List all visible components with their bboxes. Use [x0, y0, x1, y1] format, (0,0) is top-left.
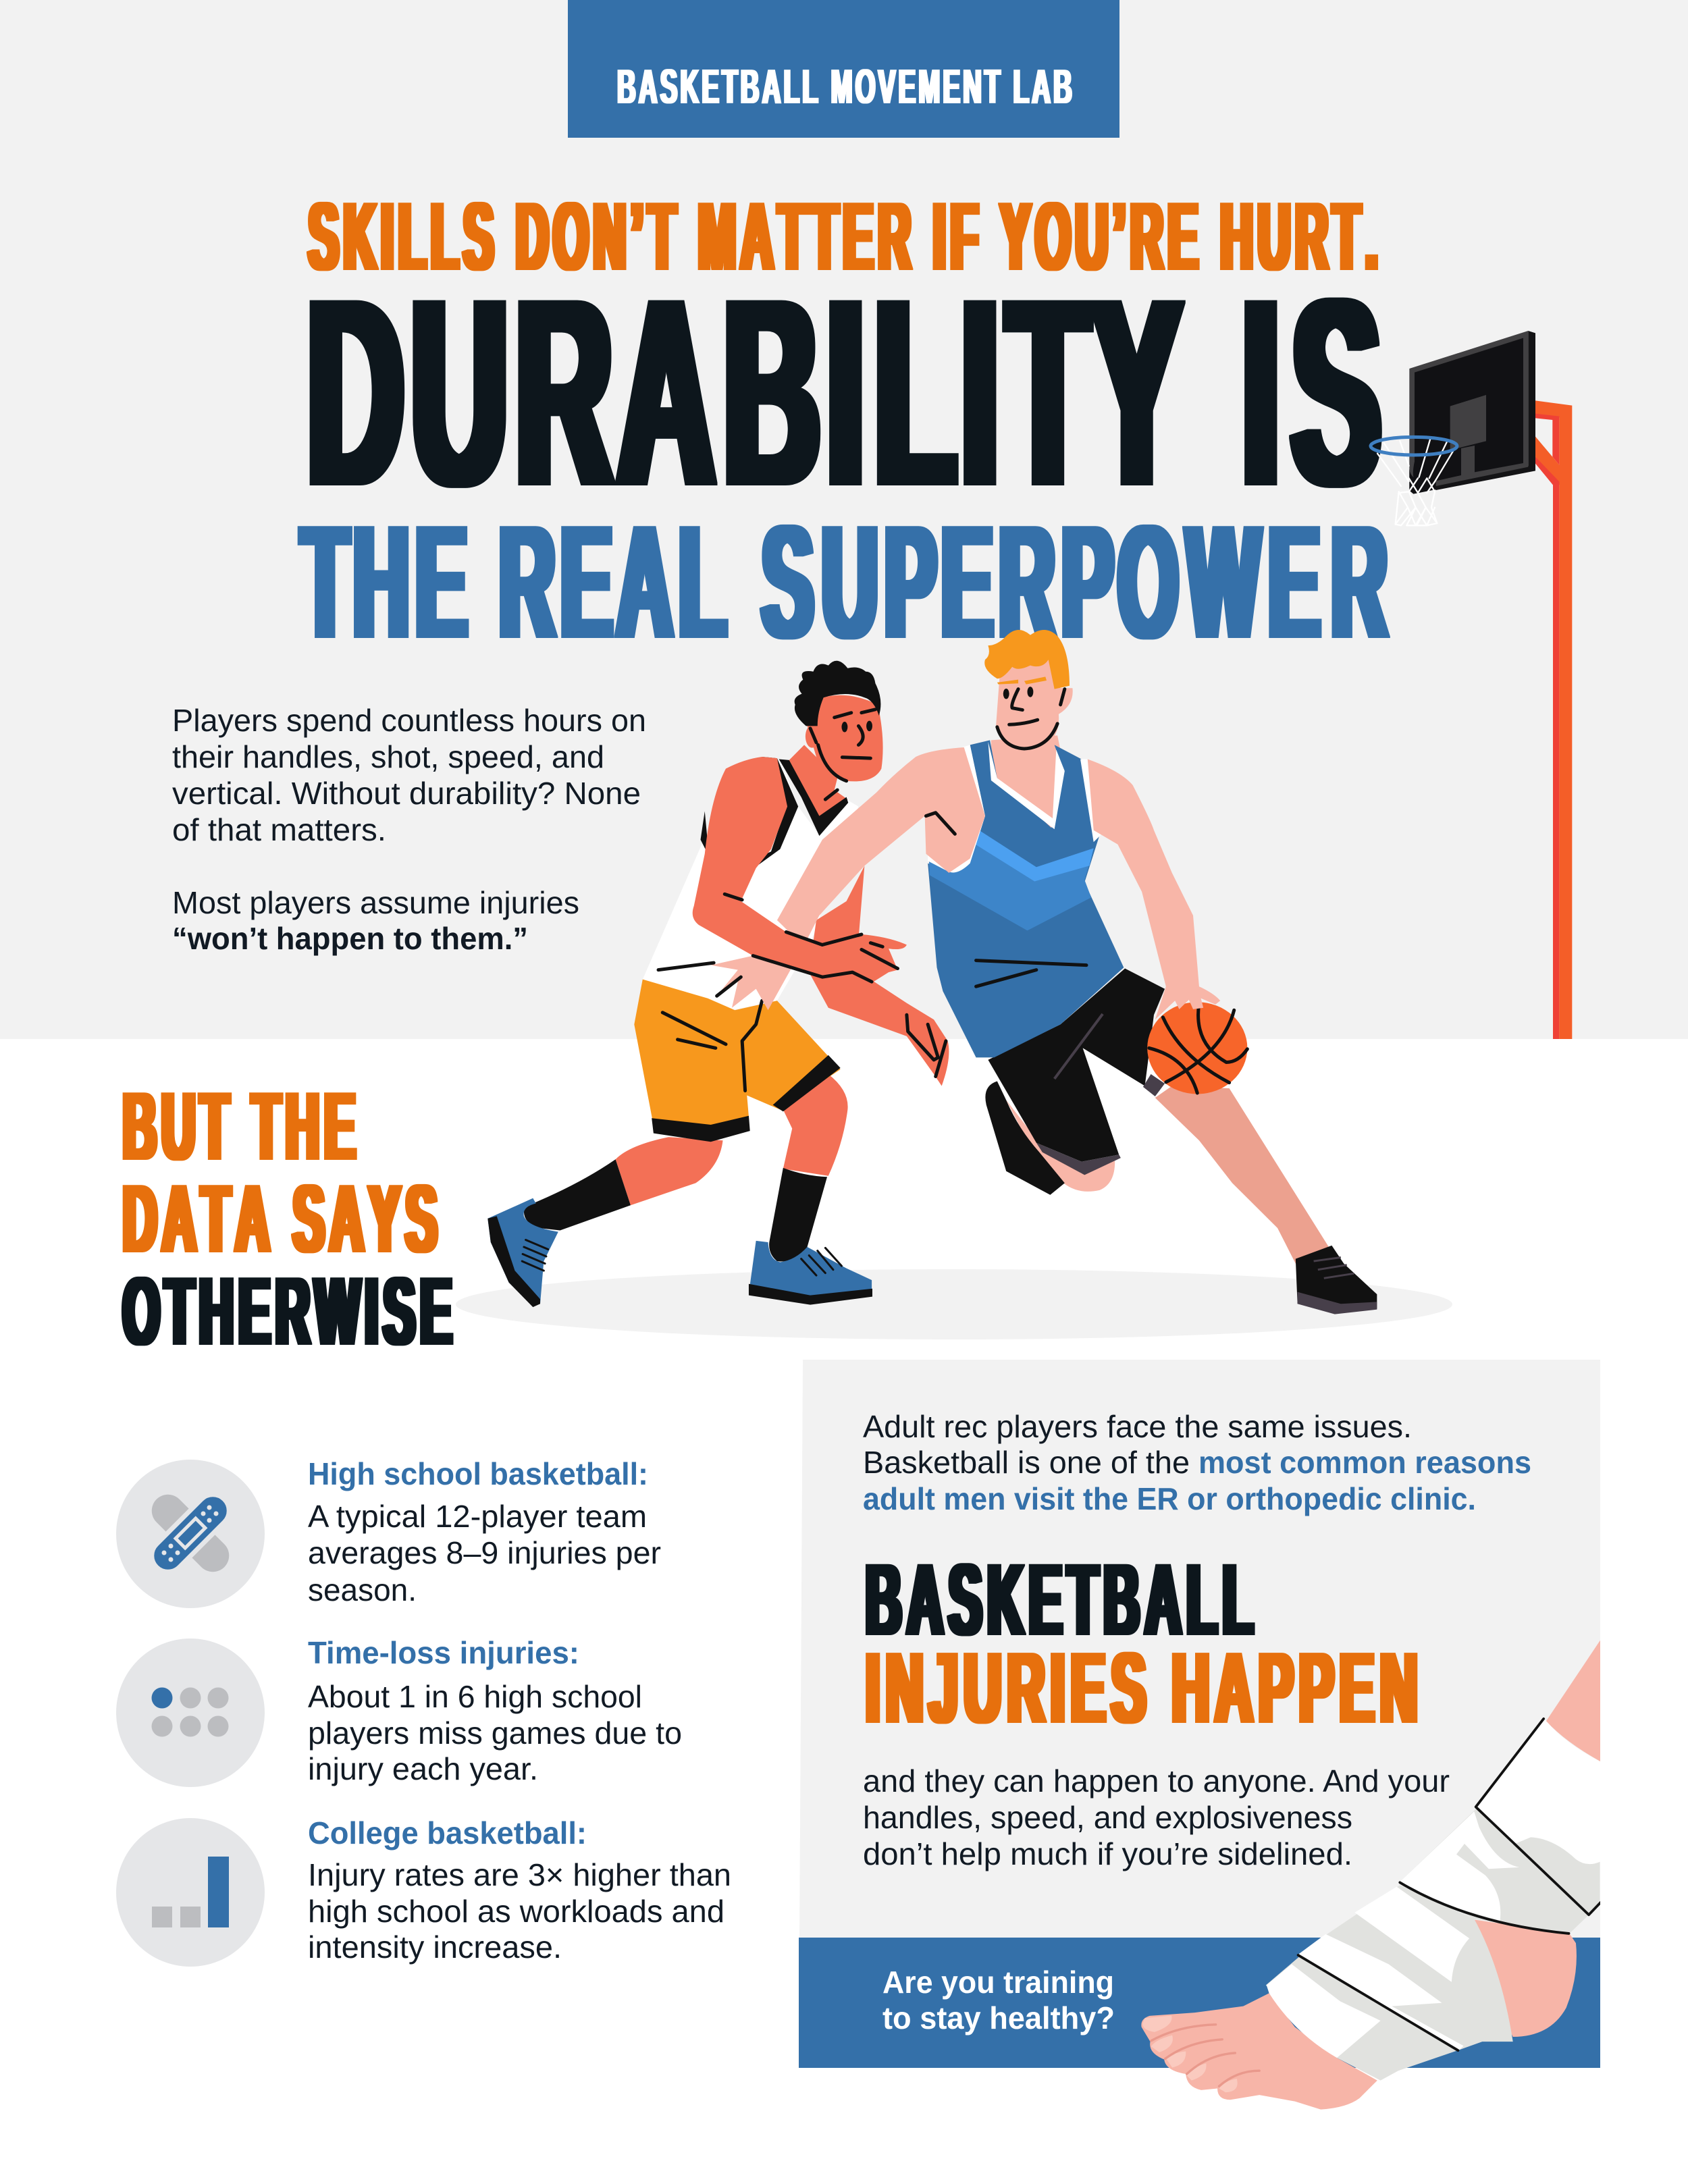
text: OTHERWISE — [123, 1258, 457, 1365]
stat: time-loss injuries: About 1 in 6 high school — [308, 1679, 642, 1714]
defender rear leg and shoe — [487, 1137, 723, 1307]
defender shorts — [634, 980, 841, 1142]
blue player neck — [991, 735, 1065, 829]
heading: basketball injuries happen: BASKETBALL — [866, 1543, 1259, 1656]
text block: can happen to anyone: handles, speed, and explosiveness — [863, 1800, 1352, 1835]
defender near arm and hand — [658, 757, 907, 982]
icon: bandage — [116, 1460, 265, 1608]
defender far arm — [809, 865, 949, 1086]
stat: high school basketball: season. — [308, 1572, 417, 1607]
lower wrap — [1266, 1885, 1513, 2081]
icon: basketball hoop — [1371, 331, 1572, 1039]
banner: Basketball Movement Lab: BASKETBALL MOVEMENT LAB — [617, 60, 1075, 114]
text block: intro paragraph: vertical. Without durability? None — [172, 776, 641, 811]
defender jersey trim — [701, 757, 848, 865]
text block: adult rec players: Adult rec players face the same issues. — [863, 1409, 1412, 1444]
blue player head — [984, 630, 1073, 749]
stat: college basketball — [308, 1815, 731, 1965]
blue player right arm and hand — [1088, 759, 1220, 1019]
text block: can happen to anyone — [863, 1763, 1450, 1871]
bandage outlines — [1298, 1719, 1602, 2050]
text block: can happen to anyone: and they can happen to anyone. And your — [863, 1763, 1450, 1799]
callout: are you training: to stay healthy? — [882, 2000, 1115, 2035]
blue player jersey — [928, 740, 1124, 1057]
defender neck and head — [789, 661, 883, 818]
title: headline block: THE REAL SUPERPOWER — [301, 492, 1387, 672]
panel: basketball injuries — [799, 1360, 1600, 1938]
text block: can happen to anyone: don’t help much if you’re sidelined. — [863, 1836, 1352, 1871]
stat: college basketball: high school as workloads and — [308, 1894, 724, 1929]
stat: high school basketball: A typical 12-player team — [308, 1499, 647, 1534]
icon: three times bars — [116, 1818, 265, 1967]
ground shadow — [456, 1269, 1452, 1339]
stat: college basketball: Injury rates are 3× higher than — [308, 1857, 731, 1892]
stat list with icons — [116, 1456, 731, 1967]
text block: adult rec players: most common reasons — [1198, 1445, 1531, 1480]
heading: but the data says otherwise: BUT THE — [123, 1073, 361, 1180]
text block: intro paragraph — [172, 703, 646, 956]
stat: high school basketball — [308, 1456, 661, 1607]
illustration: two basketball players — [487, 630, 1377, 1314]
text block: adult rec players: Basketball is one of the — [863, 1445, 1190, 1480]
panel: grey top background — [0, 0, 1688, 1039]
defender white jersey — [643, 759, 858, 1010]
title: headline block — [301, 183, 1387, 672]
blue player shorts — [988, 969, 1165, 1175]
callout: are you training: Are you training — [882, 1965, 1114, 2000]
foot skin — [1141, 1993, 1377, 2110]
blue player left arm and hand — [711, 747, 985, 1010]
stat: college basketball: College basketball: — [308, 1815, 587, 1850]
icon: one in six dots — [116, 1639, 265, 1787]
blue player front leg and shoe — [1155, 1086, 1377, 1314]
text block: intro paragraph: their handles, shot, speed, and — [172, 739, 604, 774]
text block: intro paragraph: Most players assume injuries — [172, 885, 579, 920]
banner: Basketball Movement Lab — [568, 0, 1119, 138]
heading: basketball injuries happen — [866, 1543, 1423, 1744]
stat: high school basketball: averages 8–9 injuries per — [308, 1535, 661, 1570]
title: headline block: DURABILITY IS — [308, 244, 1380, 540]
text block: adult rec players — [863, 1409, 1531, 1516]
text block: intro paragraph: Players spend countless hours on — [172, 703, 646, 738]
stat: high school basketball: High school basketball: — [308, 1456, 648, 1491]
defender front leg and shoe — [749, 1074, 872, 1305]
text block: adult rec players: adult men visit the ER or orthopedic clinic. — [863, 1481, 1476, 1516]
illustration: bandaged foot — [1141, 1633, 1605, 2110]
heel skin — [1469, 1919, 1577, 2037]
callout: are you training — [799, 1938, 1600, 2068]
heading: but the data says otherwise — [123, 1073, 457, 1365]
upper wrap — [1400, 1719, 1605, 1934]
stat: time-loss injuries — [308, 1635, 682, 1786]
stat: time-loss injuries: Time-loss injuries: — [308, 1635, 579, 1670]
blue player rear leg — [985, 1082, 1115, 1195]
stat: time-loss injuries: players miss games due to — [308, 1715, 682, 1751]
text block: intro paragraph: of that matters. — [172, 812, 386, 847]
text block: intro paragraph: “won’t happen to them.” — [172, 921, 528, 956]
heading: but the data says otherwise: DATA SAYS — [123, 1165, 442, 1273]
leg skin — [1546, 1641, 1600, 1761]
stat: college basketball: intensity increase. — [308, 1929, 562, 1965]
basketball — [1147, 1002, 1247, 1094]
stat: time-loss injuries: injury each year. — [308, 1751, 538, 1786]
